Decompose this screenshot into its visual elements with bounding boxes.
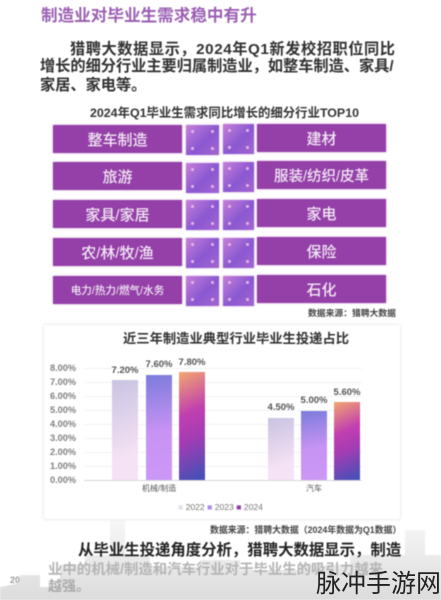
bar chart: 7.20% xyxy=(112,365,138,376)
bar chart: 6.00% xyxy=(50,391,76,401)
bar chart: 5.60% xyxy=(334,387,360,398)
source note: chart: 数据来源：猎聘大数据（2024年数据为Q1数据） xyxy=(210,525,401,535)
right industry labels: 建材 xyxy=(306,130,336,148)
chart title: 近三年制造业典型行业毕业生投递占比 xyxy=(123,331,349,346)
bar chart: 4.50% xyxy=(268,402,294,413)
right industry labels: 家电 xyxy=(306,206,336,222)
bar chart: 7.80% xyxy=(179,357,205,368)
left industry labels: 家具/家居 xyxy=(85,206,150,224)
left industry labels: 旅游 xyxy=(102,168,132,186)
bar chart xyxy=(50,357,362,493)
bar chart: 7.00% xyxy=(50,377,76,387)
bar chart: 1.00% xyxy=(50,461,76,471)
decorative purple squares xyxy=(184,122,256,308)
intro paragraph: 猎聘大数据显示，2024年Q1新发校招职位同比 xyxy=(70,41,396,58)
bar chart: 7.60% xyxy=(146,359,172,370)
right industry labels: 服装/纺织/皮革 xyxy=(274,168,369,184)
bar chart: 5.00% xyxy=(50,405,76,415)
panel: top10 industry grid xyxy=(52,122,388,308)
right industry labels: 保险 xyxy=(306,244,336,260)
intro paragraph: 增长的细分行业主要归属制造业，如整车制造、家具/ xyxy=(40,58,394,75)
left industry labels: 电力/热力/燃气/水务 xyxy=(71,284,164,296)
top10 heading: 2024年Q1毕业生需求同比增长的细分行业TOP10 xyxy=(90,106,359,120)
panel: bar chart card xyxy=(44,325,400,519)
left industry labels xyxy=(52,124,184,306)
intro paragraph xyxy=(40,40,396,94)
title: 制造业对毕业生需求稳中有升 xyxy=(41,6,257,25)
bar chart: 8.00% xyxy=(50,363,76,373)
page number: 20 xyxy=(10,575,20,585)
bar chart: 机械/制造 xyxy=(142,484,176,493)
conclusion paragraph xyxy=(48,540,402,594)
chart legend: ■ 2022 ■ 2023 ■ 2024 xyxy=(178,502,263,512)
bar chart: 3.00% xyxy=(50,433,76,443)
bar chart: 0.00% xyxy=(50,475,76,485)
source note: top10: 数据来源：猎聘大数据 xyxy=(308,308,396,318)
right industry labels xyxy=(256,122,388,304)
bar chart: 汽车 xyxy=(306,484,322,493)
conclusion paragraph: 业中的机械/制造和汽车行业对于毕业生的吸引力越来 xyxy=(48,562,383,578)
conclusion paragraph: 越强。 xyxy=(48,578,90,594)
left industry labels: 整车制造 xyxy=(87,132,148,148)
intro paragraph: 家居、家电等。 xyxy=(40,77,146,94)
left industry labels: 农/林/牧/渔 xyxy=(81,244,154,262)
conclusion paragraph: 从毕业生投递角度分析，猎聘大数据显示，制造 xyxy=(78,542,401,559)
bar chart: 4.00% xyxy=(50,419,76,429)
bar chart: 5.00% xyxy=(301,395,327,406)
right industry labels: 石化 xyxy=(306,282,336,298)
background skyline xyxy=(0,522,441,600)
bar chart: 2.00% xyxy=(50,447,76,457)
watermark: 脉冲手游网 xyxy=(316,564,441,600)
